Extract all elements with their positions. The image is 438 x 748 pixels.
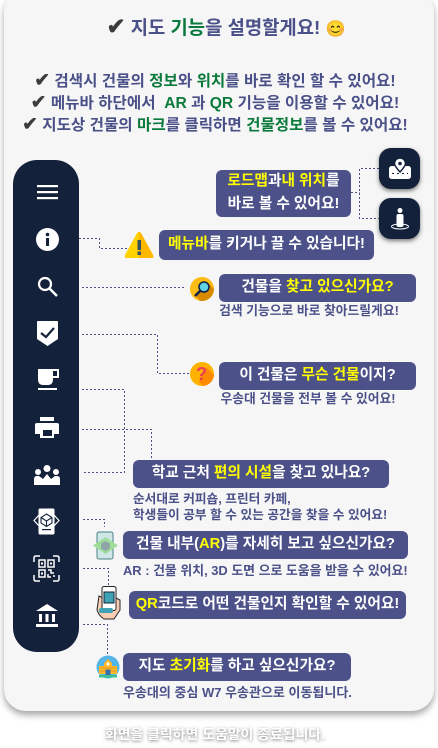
callout: QR: QR코드로 어떤 건물인지 확인할 수 있어요!: [136, 596, 399, 612]
callout: roadmap and location: [216, 170, 351, 217]
panel: navigation sidebar: [13, 160, 79, 652]
intro text block: ✔ 지도상 건물의 마크를 클릭하면 건물정보를 볼 수 있어요!: [22, 113, 408, 134]
callout: building: [219, 362, 416, 390]
callout: roadmap and location: 바로 볼 수 있어요!: [228, 196, 339, 212]
icon: school building: [96, 656, 120, 678]
icon: menu: [37, 185, 58, 200]
facilities description: 학생들이 공부 할 수 있는 공간을 찾을 수 있어요!: [133, 508, 387, 522]
icon: question mark: [190, 362, 214, 386]
callout: facilities: [133, 460, 389, 488]
icon: printer: [35, 417, 59, 438]
callout: roadmap and location: 로드맵과내 위치를: [227, 173, 340, 189]
intro text block: ✔ 검색시 건물의 정보와 위치를 바로 확인 할 수 있어요!: [34, 69, 396, 90]
reset description: 우송대의 중심 W7 우송관으로 이동됩니다.: [123, 685, 352, 700]
callout: reset: 지도 초기화를 하고 싶으신가요?: [139, 658, 335, 674]
intro text block: ✔ 메뉴바 하단에서 AR 과 QR 기능을 이용할 수 있어요!: [31, 91, 399, 112]
facilities description: 순서대로 커피숍, 프린터 카페,: [133, 492, 291, 506]
icon: coffee cup: [38, 369, 59, 390]
callout: AR: [123, 531, 408, 559]
icon: QR code: [33, 555, 60, 582]
icon: warning: [124, 232, 154, 258]
facilities description: [133, 492, 387, 522]
button: roadmap: [379, 148, 420, 189]
search description: 검색 기능으로 바로 찾아드릴게요!: [219, 303, 399, 318]
callout: menu bar: 메뉴바를 키거나 끌 수 있습니다!: [168, 236, 365, 252]
icon: hand with QR phone: [96, 586, 120, 620]
intro text block: [22, 69, 408, 134]
callout: building: 이 건물은 무슨 건물이지?: [239, 367, 396, 383]
callout: menu bar: [159, 230, 374, 260]
callout: QR: [129, 591, 406, 619]
AR description: AR : 건물 위치, 3D 도면 으로 도움을 받을 수 있어요!: [123, 563, 408, 578]
building description: 우송대 건물을 전부 볼 수 있어요!: [220, 391, 396, 406]
icon: magnifier: [190, 277, 214, 301]
callout: search: 건물을 찾고 있으신가요?: [241, 279, 394, 295]
callout: AR: 건물 내부(AR)를 자세히 보고 싶으신가요?: [136, 536, 395, 552]
icon: institution: [36, 604, 58, 627]
footer hint: 화면을 클릭하면 도움말이 종료됩니다.: [105, 726, 325, 742]
icon: AR cube: [33, 508, 60, 534]
icon: info: [36, 228, 59, 251]
callout: reset: [123, 653, 351, 681]
callout: search: [219, 274, 416, 302]
icon: shield check: [37, 321, 58, 346]
callout: facilities: 학교 근처 편의 시설을 찾고 있나요?: [152, 465, 370, 481]
icon: search: [38, 276, 58, 297]
icon: question mark: ?: [196, 364, 207, 384]
icon: AR phone: [93, 532, 118, 560]
title: ✔ 지도 기능을 설명할게요! 😊: [107, 14, 345, 39]
button: my location: [379, 198, 420, 239]
icon: people: [34, 465, 60, 485]
